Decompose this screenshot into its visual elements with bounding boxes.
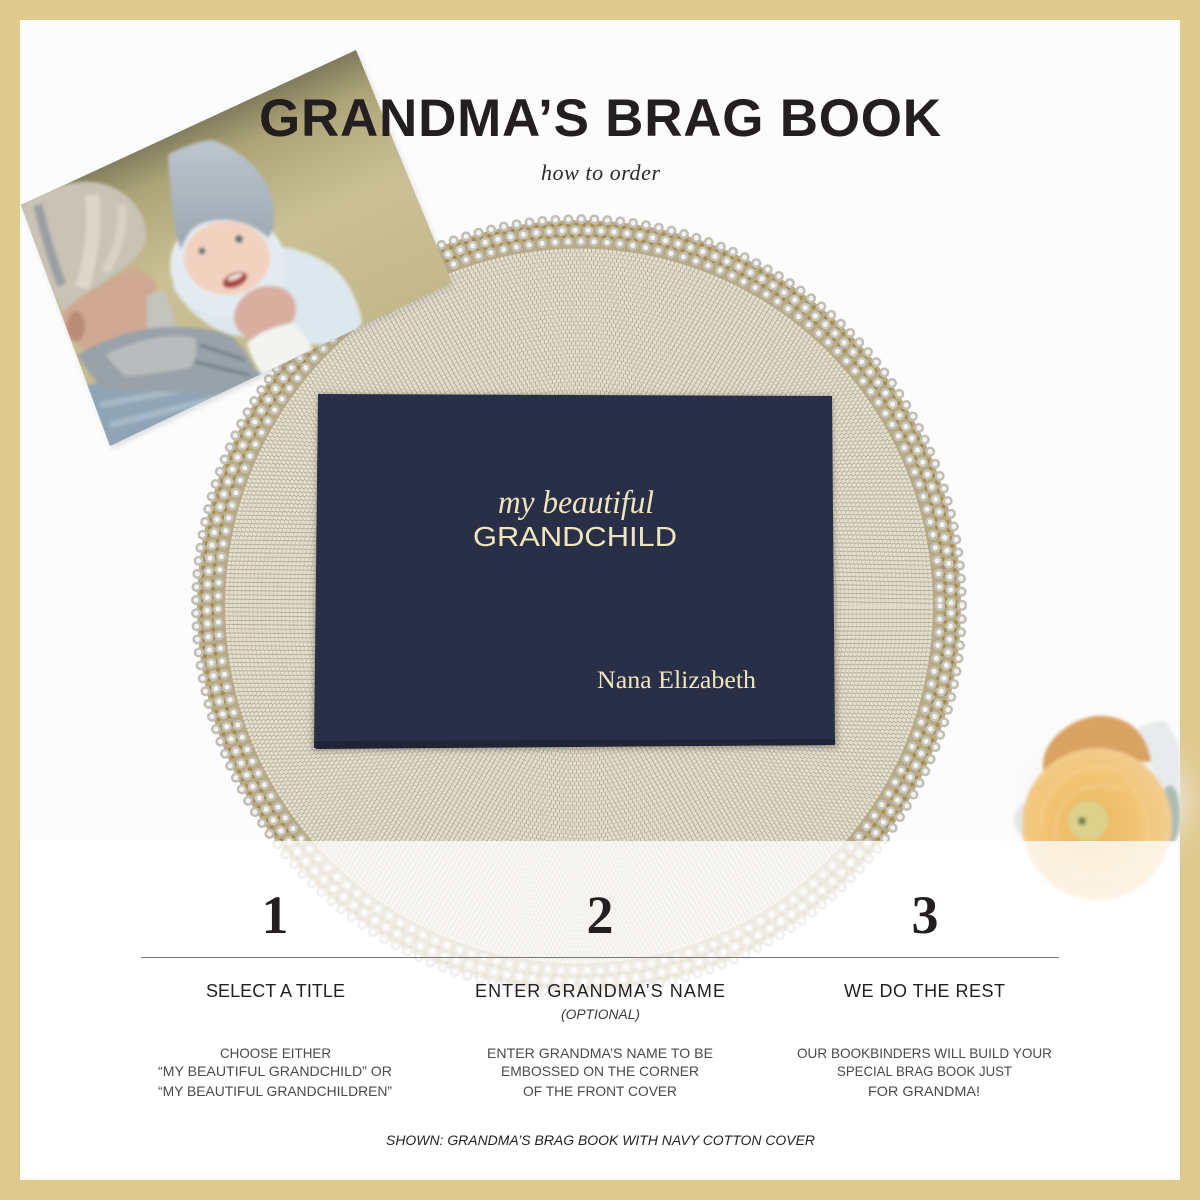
book title capitals: GRANDCHILD — [473, 521, 677, 552]
step 2 description: OF THE FRONT COVER — [523, 1083, 677, 1099]
step 3 description: SPECIAL BRAG BOOK JUST — [837, 1063, 1012, 1079]
lower sweater — [87, 369, 262, 446]
step 2 optional note: (OPTIONAL) — [561, 1006, 640, 1022]
step 2 text — [475, 981, 725, 1099]
grandmother face — [63, 268, 156, 350]
step 2 number: 2 — [586, 885, 614, 945]
step 3 text — [797, 981, 1052, 1099]
step 1 heading: SELECT A TITLE — [206, 981, 345, 1001]
navy book — [312, 394, 838, 751]
scarf — [77, 327, 257, 393]
step 3 number: 3 — [912, 885, 938, 945]
baby face — [184, 221, 270, 295]
step 3 description — [797, 1045, 1052, 1099]
translucent white instruction panel — [20, 841, 1180, 1180]
step 2 heading: ENTER GRANDMA’S NAME — [475, 981, 725, 1001]
step 1 description: “MY BEAUTIFUL GRANDCHILD” OR — [158, 1063, 392, 1079]
ranunculus centre — [1068, 801, 1108, 841]
step 2 description: ENTER GRANDMA’S NAME TO BE — [487, 1045, 713, 1061]
front ranunculus — [1022, 748, 1172, 900]
step 2 description — [487, 1045, 713, 1099]
step 1 text — [158, 981, 392, 1099]
back ranunculus — [1043, 716, 1151, 778]
step 2 description: EMBOSSED ON THE CORNER — [501, 1063, 699, 1079]
soft grey shading near flower — [1035, 750, 1185, 850]
subtitle: how to order — [541, 160, 660, 185]
photo of grandmother and baby — [21, 50, 454, 449]
step 1 description: CHOOSE EITHER — [220, 1045, 331, 1061]
baby hood — [168, 218, 284, 302]
book title script: my beautiful — [498, 485, 654, 521]
step 3 description: FOR GRANDMA! — [868, 1083, 980, 1099]
step 1 description: “MY BEAUTIFUL GRANDCHILDREN” — [158, 1083, 392, 1099]
footer caption: SHOWN: GRANDMA’S BRAG BOOK WITH NAVY COTTON COVER — [386, 1133, 815, 1148]
white sleeve — [247, 323, 313, 377]
grey collar — [146, 290, 178, 330]
baby hat — [168, 140, 274, 250]
grandmother hand — [232, 284, 298, 340]
step 1 number: 1 — [262, 885, 288, 945]
glass vase — [1138, 721, 1180, 800]
flower and glass vase — [1014, 716, 1186, 900]
book name embossing: Nana Elizabeth — [597, 667, 757, 694]
beaded round placemat — [196, 219, 962, 993]
step 3 heading: WE DO THE REST — [844, 981, 1005, 1001]
baby body — [172, 247, 362, 345]
step 1 description — [158, 1045, 392, 1099]
title: GRANDMA’S BRAG BOOK — [259, 89, 941, 148]
grandmother hair — [10, 182, 146, 312]
step 3 description: OUR BOOKBINDERS WILL BUILD YOUR — [797, 1045, 1052, 1061]
